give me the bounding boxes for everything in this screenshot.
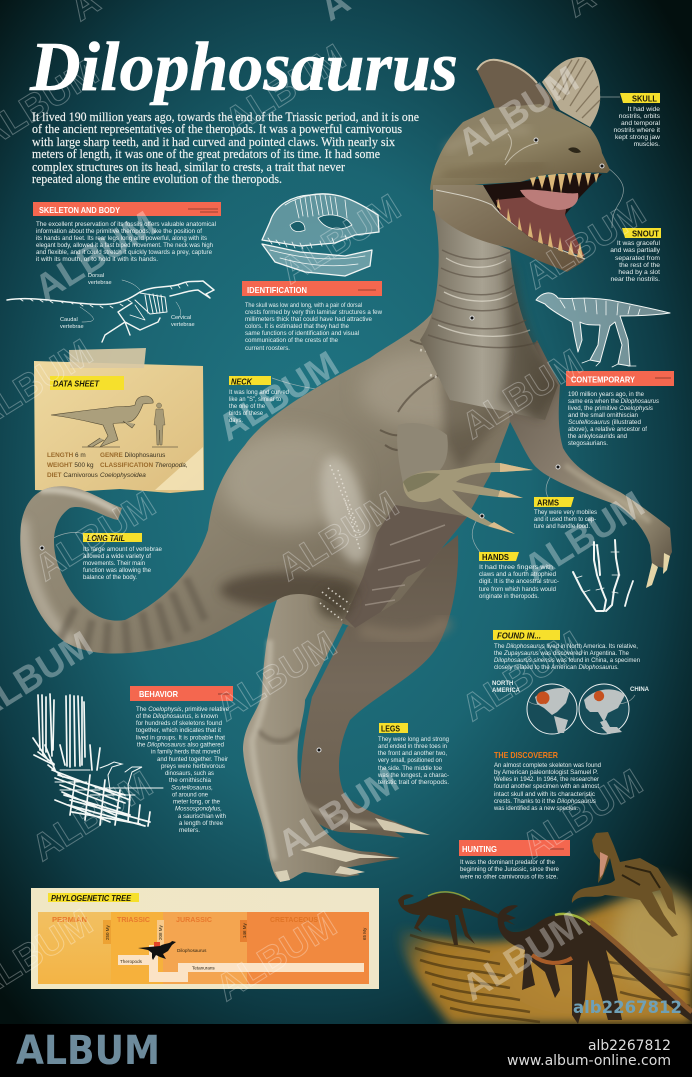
large foreground dinosaur	[498, 905, 692, 1024]
map labels: AMERICA	[492, 688, 521, 694]
skull text: muscles.	[634, 141, 660, 148]
ground line	[82, 446, 178, 448]
panel: snout	[610, 228, 661, 283]
near upper arm	[397, 423, 448, 492]
behavior text: and hunted together. Their	[157, 756, 229, 763]
behavior text: meters.	[179, 827, 200, 834]
hunting scene	[398, 832, 692, 1024]
skull text: nostrils where it	[614, 127, 660, 134]
legs text: the side. The middle toe	[378, 765, 442, 772]
long tail text	[83, 546, 162, 581]
lower teeth	[497, 198, 583, 258]
legs text: the front and another two,	[378, 750, 447, 757]
watermarks: ALBUM	[518, 191, 653, 297]
watermarks: ALBUM	[28, 483, 163, 589]
discoverer text: An almost complete skeleton was found	[494, 762, 601, 769]
skeleton drawing	[7, 280, 214, 342]
arms text: They were very mobiles	[534, 509, 598, 516]
behavior text	[136, 706, 229, 834]
leader lines	[42, 97, 624, 552]
dinosaur sketch	[51, 396, 153, 447]
map labels	[492, 681, 650, 694]
panel: hunting	[459, 840, 570, 880]
intro text: meters of length, it was one of the great predators of its time. It had some	[32, 146, 380, 161]
watermarks: ALBUM	[28, 203, 163, 309]
hunting text: It was the dominant predator of the	[460, 859, 555, 866]
identification text: communication of the crests of the	[245, 337, 338, 344]
heading: hunting: HUNTING	[462, 844, 497, 854]
panel: hands	[479, 552, 559, 600]
long tail text: Its large amount of vertebrae	[83, 546, 162, 553]
discoverer text: intact skull and with its characteristic	[494, 791, 596, 798]
behavior text: meter long, or the	[173, 798, 220, 806]
heading: data sheet: DATA SHEET	[53, 380, 100, 388]
snout text: separated from	[615, 255, 660, 262]
skull text: nostrils, orbits	[619, 113, 661, 120]
watermarks: ALBUM	[209, 903, 344, 1009]
neck text: birds of these	[229, 410, 263, 417]
period labels: TRIASSIC	[117, 915, 151, 924]
torso and tail	[20, 300, 510, 656]
behavior text: The Coelophysis, primitive relative	[136, 706, 229, 713]
label: long tail: LONG TAIL	[87, 534, 125, 543]
contemporary text: and the small ornithiscian	[568, 412, 638, 419]
contemporary text: Scutellosaurus (illustrated	[568, 419, 641, 426]
footer bar	[0, 1024, 692, 1077]
footer id and url	[507, 1038, 671, 1069]
tongue	[520, 190, 578, 210]
hand skeleton drawing	[573, 540, 633, 611]
skeleton text: elegant body, allowed it a fast biped movement. The neck was high	[36, 242, 213, 249]
period labels: JURASSIC	[176, 915, 213, 924]
panel: the discoverer	[493, 750, 601, 812]
behavior text: dinosaurs, such as	[165, 770, 215, 777]
intro text: with large sharp teeth, and it had curved and pointed claws. With nearly six	[32, 134, 395, 149]
branch labels: Tetanurans	[192, 966, 215, 970]
title: Dilophosaurus	[29, 29, 458, 106]
contemporary text	[568, 391, 660, 447]
contemporary text: 190 million years ago, in the	[568, 391, 644, 398]
legs text: was the longest, a charac-	[377, 772, 449, 779]
panel: skeleton and body	[7, 202, 221, 342]
skeleton text	[36, 221, 216, 263]
panel: long tail	[83, 533, 162, 581]
dust glow	[613, 885, 692, 985]
heading: phylogenetic tree: PHYLOGENETIC TREE	[51, 894, 132, 903]
snout text: near the nostrils.	[611, 276, 660, 283]
data sheet text: Coelophysoidea	[100, 472, 146, 479]
long tail text: allowed a wide variety of	[83, 553, 151, 560]
behavior text: of around one	[172, 791, 208, 798]
skull	[430, 104, 610, 190]
heading: identification	[242, 281, 382, 296]
snout text: and was partially	[610, 247, 661, 254]
sand ripples	[410, 935, 690, 1022]
behavior text: in family herds that moved	[151, 749, 220, 756]
heading: data sheet	[50, 376, 124, 390]
branch labels: Theropods	[120, 959, 143, 964]
intro text: repeated along the entire evolution of the theropods.	[32, 171, 282, 186]
watermarks: ALBUM	[455, 341, 590, 447]
panel: found in	[492, 630, 650, 734]
contemporary text: above), a relative ancestor of	[568, 426, 647, 433]
near hand and fingers	[403, 463, 533, 534]
discoverer text: was identified as a new species.	[493, 805, 578, 812]
data sheet text: WEIGHT 500 kg	[47, 462, 94, 469]
watermarks: ALBUM	[515, 761, 650, 867]
belly	[345, 505, 470, 630]
discoverer text	[493, 762, 601, 812]
legs text: and ended in three toes in	[378, 743, 447, 750]
data sheet text: GENRE Dilophosaurus	[100, 452, 165, 459]
panel: behavior	[130, 686, 233, 834]
identification text: current roosters.	[245, 345, 290, 352]
heading: the discoverer: THE DISCOVERER	[494, 750, 558, 760]
skeleton labels: Caudal	[60, 317, 78, 323]
skull text: kept strong jaw	[615, 134, 660, 141]
skeleton text: its hands and feet. Its rear legs long and powerful, along with its	[36, 235, 208, 242]
skull text	[614, 106, 661, 148]
behavior text: together, which indicates that it	[136, 727, 221, 734]
skeleton labels: Dorsal	[88, 273, 104, 279]
footer logo: ALBUM	[16, 1028, 160, 1074]
watermarks: ALBUM	[209, 623, 344, 729]
intro text: complex structures on its head, similar to crests, a trait that never	[32, 159, 346, 174]
data sheet text: CLASSIFICATION Theropoda,	[100, 462, 188, 469]
data sheet text: LENGTH 6 m	[47, 452, 86, 459]
identification text: colors. It is estimated that they had the	[245, 323, 349, 330]
watermarks: ALBUM	[451, 58, 586, 164]
skeleton text: The excellent preservation of its fossils offers valuable anatomical	[36, 221, 216, 228]
heading: skeleton and body: SKELETON AND BODY	[39, 205, 120, 215]
label: found in	[493, 630, 560, 640]
found in text: The Dilophosaurus lived in North America. Its relative,	[494, 643, 638, 650]
behavior text: the ornithischia	[169, 777, 211, 784]
skull drawing	[262, 194, 379, 276]
skeleton labels: vertebrae	[88, 280, 112, 286]
claws	[646, 563, 658, 588]
period labels: CRETACEOUS	[270, 915, 318, 924]
hands text: It had three fingers with	[479, 564, 553, 571]
age labels: 250 My	[105, 924, 110, 940]
identification text: crests formed by very thin laminar structures a few	[245, 309, 382, 316]
panel: phylogenetic tree	[31, 888, 379, 989]
panel: legs	[377, 723, 449, 786]
front leg	[243, 587, 400, 882]
data sheet text	[47, 452, 188, 479]
behavior text: Scutellosaurus,	[171, 784, 213, 791]
footer id and url: alb2267812	[588, 1038, 671, 1054]
hunting text	[459, 859, 559, 880]
pointer dots	[40, 138, 604, 752]
map labels: NORTH	[492, 681, 513, 687]
panel: skull	[614, 93, 661, 148]
upper teeth	[530, 173, 599, 194]
skeleton labels: vertebrae	[60, 324, 84, 330]
tree paper	[31, 888, 379, 989]
heading: skeleton and body	[33, 202, 221, 216]
hands text: originate in theropods.	[479, 593, 539, 600]
herd and trees drawing	[33, 694, 163, 826]
behavior text: a length of three	[179, 820, 223, 827]
intro text: It lived 190 million years ago, towards the end of the Triassic period, and it is one	[32, 109, 419, 124]
contemporary text: lived, the primitive Coelophysis	[568, 405, 654, 412]
hunting text: were no other carnivorous of its size.	[459, 874, 558, 880]
watermarks: ALBUM	[517, 483, 652, 589]
behavior text: the Dilophosaurus also gathered	[137, 742, 224, 749]
legs text	[377, 736, 449, 786]
sand	[398, 885, 692, 1024]
panel: data sheet	[34, 348, 204, 493]
identification text: millimeters thick that could have had attractive	[245, 316, 372, 323]
neck text: It was long and curved	[229, 389, 289, 396]
discoverer text: by American paleontologist Samuel P.	[494, 769, 598, 776]
sheet highlight	[155, 447, 203, 490]
dinosaur illustration	[20, 57, 672, 882]
hands text: claws and a fourth atrophied	[479, 571, 556, 578]
watermarks: ALBUM	[25, 763, 160, 869]
neck text	[229, 389, 289, 424]
image id watermark: alb2267812	[573, 998, 682, 1018]
head	[430, 57, 610, 272]
contemporary text: stegosaurians.	[568, 440, 608, 447]
hands text	[479, 564, 559, 600]
behavior text: of the Dilophosaurus, is known	[136, 713, 218, 720]
behavior text: Mossospondylus,	[175, 806, 222, 813]
found in text	[494, 643, 640, 671]
heading: behavior	[130, 686, 233, 701]
branches	[118, 945, 364, 982]
snout text: head by a slot	[618, 269, 660, 276]
paper	[34, 361, 204, 493]
neck text: like an "S", similar to	[229, 396, 281, 403]
panel: neck	[229, 376, 289, 424]
watermarks: ALBUM	[455, 623, 590, 729]
behavior text: lived in groups. It is probable that	[136, 734, 225, 742]
skeleton text: and flexible, and it could stretch it quickly towards a prey, capture	[36, 249, 212, 256]
skull text: and temporal	[621, 120, 661, 127]
age labels: 208 My	[158, 924, 163, 940]
legs text: They were long and strong	[378, 736, 449, 743]
mouth interior	[483, 174, 602, 257]
found in text: the Zupaysaurus was discovered in Argentina. The	[494, 650, 629, 657]
watermarks: ALBUM	[273, 186, 408, 292]
identification text: The skull was low and long, with a pair of dorsal	[245, 302, 362, 309]
hands text: ture from which hands would	[479, 586, 556, 593]
timeline chart	[38, 912, 369, 984]
left crest	[477, 60, 560, 118]
skeleton labels: vertebrae	[171, 322, 195, 328]
eye	[568, 147, 581, 153]
hunting text: beginning of the Jurassic, since there	[460, 866, 559, 873]
arms text	[534, 509, 598, 530]
behavior text: a saurischian with	[178, 813, 226, 820]
watermarks: ALBUM	[271, 483, 406, 589]
arms text: and it used them to cap-	[534, 516, 596, 523]
watermarks: ALBUM	[211, 343, 346, 449]
label: hands: HANDS	[482, 553, 510, 562]
long tail text: movements. Their main	[83, 560, 145, 567]
found in text: Dilophosaurus sinensis was found in China, a specimen	[494, 657, 640, 664]
scutellosaurus drawing	[536, 293, 670, 367]
discoverer text: crests. Thanks to it the Dilophosaurus	[494, 798, 597, 805]
heading: behavior: BEHAVIOR	[139, 689, 178, 699]
neck	[420, 205, 558, 420]
legs text: teristic trait of theropods.	[378, 779, 449, 786]
skull text: It had wide	[628, 106, 660, 113]
behavior text: preys were herbivorous	[161, 763, 226, 770]
intro text	[32, 109, 419, 186]
age labels: 65 My	[362, 927, 367, 940]
label: arms: ARMS	[537, 498, 560, 508]
globes map	[527, 684, 635, 734]
heading: contemporary: CONTEMPORARY	[571, 374, 635, 384]
identification text: same functions of identification and visual	[245, 330, 359, 337]
age labels: 146 My	[242, 922, 247, 938]
panel: identification	[242, 281, 382, 352]
age labels	[105, 922, 367, 940]
label: snout: SNOUT	[632, 230, 659, 238]
neck text: the one of the	[229, 403, 265, 410]
skeleton labels: Cervical	[171, 315, 191, 321]
discoverer text: Welles in 1942. In 1964, the researcher	[494, 776, 600, 783]
arms text: ture and handle food.	[534, 523, 590, 530]
far arm	[505, 340, 672, 588]
skeleton text: it with its mouth, or to hold it with its hands.	[36, 256, 158, 263]
right crest	[542, 57, 600, 127]
footer id and url: www.album-online.com	[507, 1053, 671, 1069]
label: skull: SKULL	[632, 94, 657, 104]
behavior text: for hundreds of skeletons found	[136, 720, 222, 727]
label: found in: FOUND IN...	[497, 632, 541, 640]
skeleton text: information about the primitive theropods, like the position of	[36, 228, 202, 235]
branch labels	[120, 948, 215, 970]
human sketch	[154, 403, 165, 445]
watermarks: ALBUM	[455, 903, 590, 1009]
snout text: It was graceful	[617, 240, 661, 247]
found in text: closely related to the American Dilophosaurus.	[494, 664, 619, 671]
tape	[69, 348, 146, 368]
snout text: the rest of the	[619, 262, 660, 269]
small dinosaur silhouette	[138, 941, 176, 960]
hands text: digit. It is the ancestral struc-	[479, 578, 559, 585]
branch labels: Dilophosaurus	[177, 948, 207, 953]
long tail text: balance of the body.	[83, 574, 137, 581]
small far dinosaur	[398, 892, 515, 945]
lower jaw	[433, 185, 585, 272]
neck text: days.	[229, 417, 243, 424]
label: neck: NECK	[231, 378, 253, 386]
contemporary text: the ankylosaurids and	[568, 433, 627, 440]
legs text: very small, positioned on	[378, 757, 442, 764]
long tail text: function was allowing the	[83, 567, 151, 574]
intro text: of the ancient representatives of the theropods. It was a powerful carnivorous	[32, 121, 402, 136]
period labels	[52, 915, 318, 924]
period labels: PERMIAN	[52, 915, 87, 924]
identification text	[245, 302, 382, 352]
label: legs: LEGS	[381, 724, 401, 734]
panel: arms	[534, 497, 598, 530]
data sheet text: DIET Carnivorous	[47, 472, 98, 479]
panel: contemporary	[566, 371, 674, 447]
watermarks: ALBUM	[218, 36, 353, 142]
snout text	[610, 240, 661, 283]
watermarks: ALBUM	[271, 759, 406, 865]
back leg	[300, 535, 458, 838]
map labels: CHINA	[630, 687, 650, 693]
contemporary text: same era when the Dilophosaurus	[568, 398, 660, 405]
heading: identification: IDENTIFICATION	[247, 285, 307, 295]
skeleton labels	[60, 273, 195, 330]
discoverer text: found another specimen with an almost	[494, 783, 599, 790]
leaping dinosaur	[572, 832, 678, 937]
